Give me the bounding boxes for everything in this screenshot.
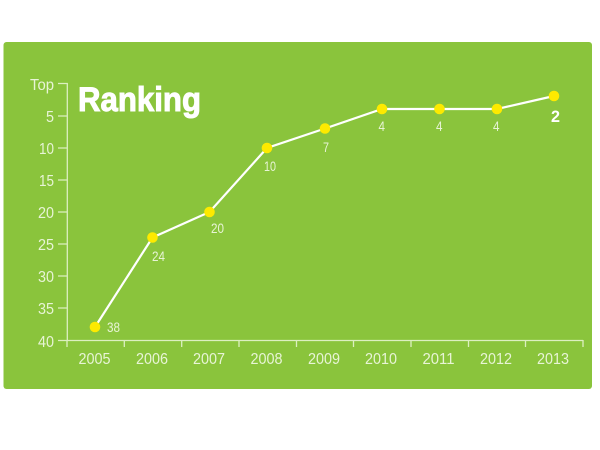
x axis: 2006 <box>136 351 168 368</box>
title: Ranking <box>78 81 201 119</box>
x axis: 2012 <box>480 351 512 368</box>
y axis <box>30 77 67 351</box>
y axis: 5 <box>46 109 54 126</box>
x axis: 2007 <box>193 351 225 368</box>
y axis: 40 <box>38 334 54 351</box>
ranking line <box>95 96 554 327</box>
y axis: 25 <box>38 237 54 254</box>
data labels: 20 <box>211 220 224 236</box>
data labels: 7 <box>323 139 329 155</box>
x axis <box>67 340 583 368</box>
data labels: 4 <box>436 118 443 134</box>
y axis: 15 <box>39 173 54 190</box>
y axis: 10 <box>39 141 54 158</box>
data labels <box>107 107 560 335</box>
y axis: 20 <box>38 205 54 222</box>
data labels: 38 <box>107 319 120 335</box>
y axis: 30 <box>38 269 54 286</box>
x axis: 2010 <box>365 351 397 368</box>
data labels: 4 <box>493 118 500 134</box>
y axis: 35 <box>38 301 54 318</box>
x axis: 2009 <box>308 351 340 368</box>
data labels: 10 <box>264 158 276 174</box>
x axis: 2011 <box>422 351 455 368</box>
data labels: 24 <box>152 248 165 264</box>
data labels: 2 <box>551 107 560 126</box>
x axis: 2008 <box>250 351 283 368</box>
data points <box>90 91 559 332</box>
x axis: 2013 <box>537 351 569 368</box>
x axis: 2005 <box>78 351 111 368</box>
data labels: 4 <box>378 118 385 134</box>
panel: green background <box>4 42 592 389</box>
y axis: Top <box>30 77 54 94</box>
